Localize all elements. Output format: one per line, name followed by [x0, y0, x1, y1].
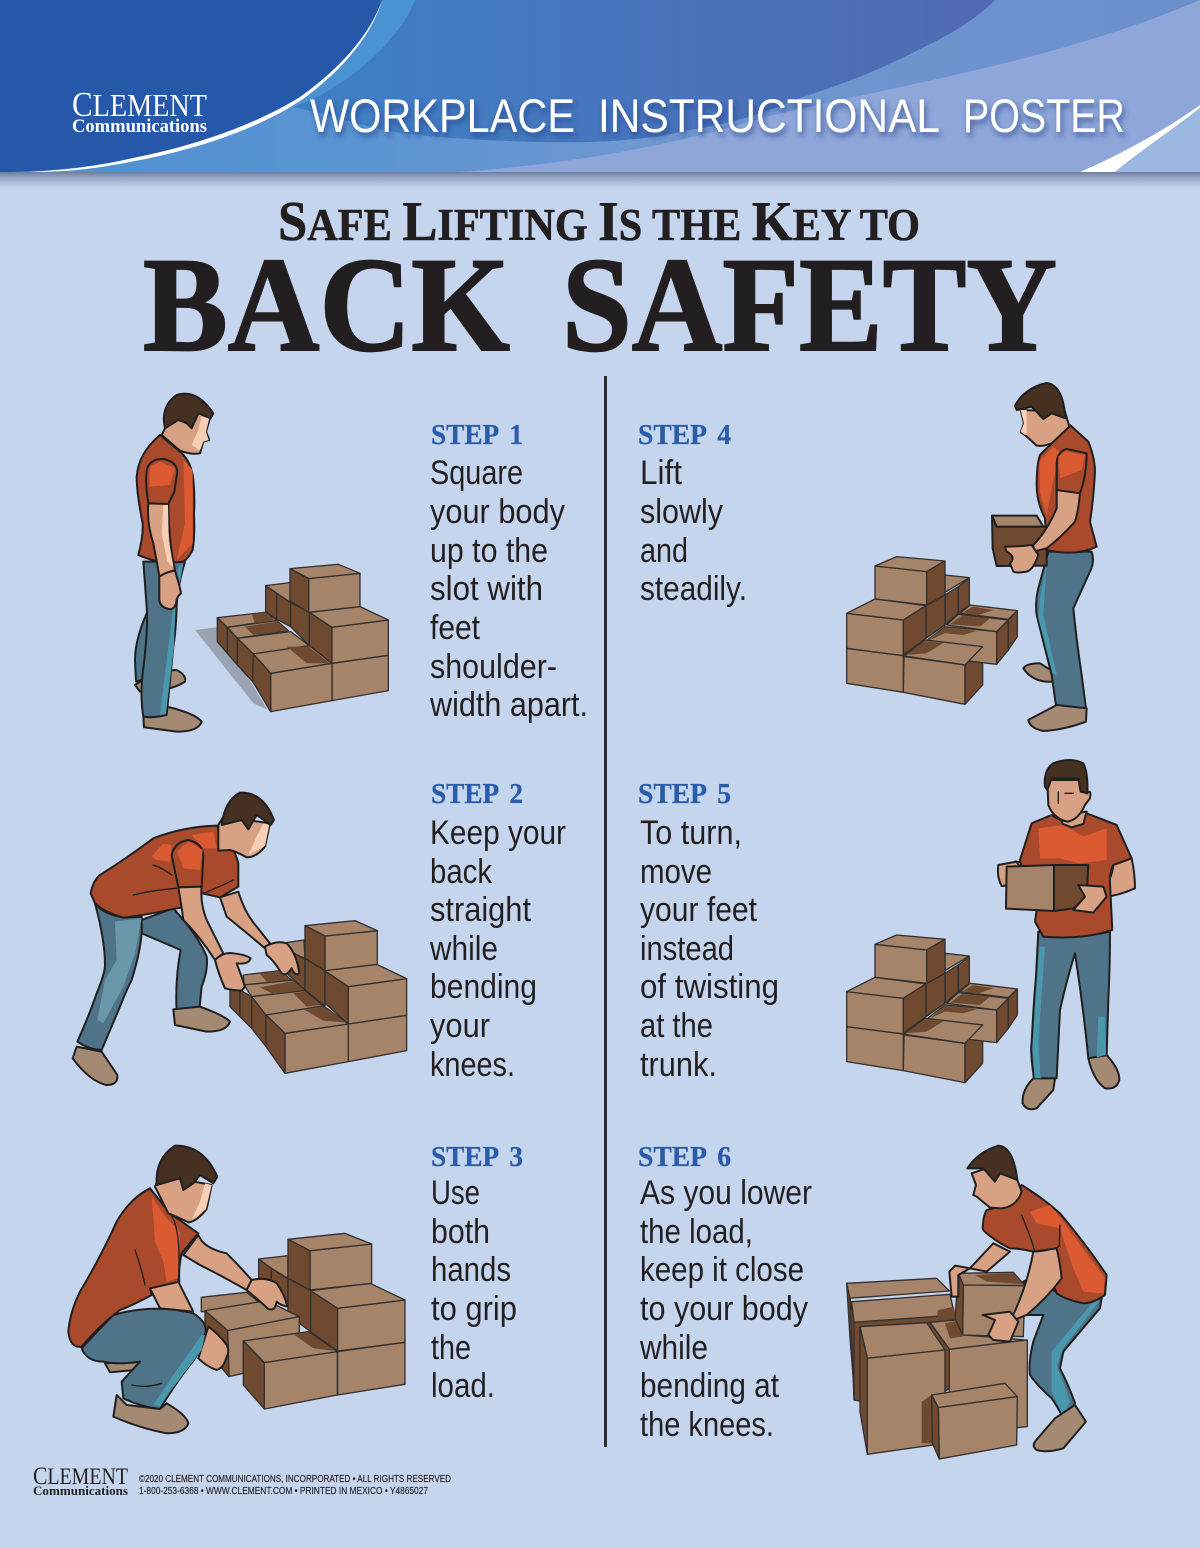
step 2 instructions: straight [430, 891, 531, 929]
step 2 instructions: bending [430, 968, 537, 1006]
step 1 illustration [135, 394, 388, 732]
step 3 instructions: to grip [431, 1290, 517, 1328]
step 1 instructions: your body [430, 493, 565, 531]
panel: step 5 [638, 760, 1135, 1109]
step 1 instructions: feet [430, 609, 480, 647]
step 4 instructions: Lift [640, 454, 683, 492]
step 5 instructions: your feet [640, 891, 757, 929]
step 3 instructions: load. [431, 1367, 495, 1405]
step 3 instructions: Use [431, 1174, 480, 1212]
panel: step 2 [73, 779, 566, 1085]
subtitle: SAFE LIFTING IS THE KEY TO [278, 191, 920, 253]
step 5 instructions: of twisting [640, 968, 779, 1006]
step 5 instructions: instead [640, 930, 734, 968]
step 6 instructions: keep it close [640, 1251, 804, 1289]
logo: Clement Communications: Communications [72, 116, 207, 137]
banner heading [310, 90, 1125, 143]
step 5 heading: STEP 5 [638, 779, 731, 810]
step 5 instructions: To turn, [640, 814, 742, 852]
footer legal text [139, 1474, 451, 1497]
step 6 heading: STEP 6 [638, 1142, 731, 1173]
footer legal text: ©2020 CLEMENT COMMUNICATIONS, INCORPORATED • ALL RIGHTS RESERVED [139, 1474, 451, 1485]
step 6 illustration [847, 1146, 1107, 1459]
header banner [0, 0, 1200, 188]
step 2 illustration [73, 793, 407, 1085]
main title: BACK [143, 231, 510, 380]
step 2 instructions: Keep your [430, 814, 566, 852]
step 3 heading: STEP 3 [431, 1142, 523, 1173]
banner heading: INSTRUCTIONAL [598, 90, 940, 143]
step 4 heading: STEP 4 [638, 420, 731, 451]
step 6 instructions: to your body [640, 1290, 808, 1328]
step 2 instructions: while [429, 930, 498, 968]
step 6 instructions [639, 1174, 812, 1444]
logo: Clement Communications [72, 85, 207, 137]
step 1 instructions: Square [430, 454, 523, 492]
step 4 instructions: steadily. [640, 570, 747, 608]
footer legal text: 1-800-253-6368 • WWW.CLEMENT.COM • PRINTED IN MEXICO • Y4865027 [139, 1486, 428, 1497]
step 4 illustration [847, 383, 1097, 731]
main title [143, 231, 1057, 380]
step 3 instructions [431, 1174, 517, 1405]
step 5 illustration [847, 760, 1135, 1109]
step 2 instructions: knees. [430, 1046, 515, 1084]
step 5 instructions [640, 814, 779, 1084]
step 2 instructions [429, 814, 566, 1084]
title block [143, 191, 1057, 380]
step 1 instructions: width apart. [429, 686, 588, 724]
step 3 illustration [68, 1146, 405, 1433]
footer logo: Communications [33, 1483, 128, 1498]
step 4 instructions: slowly [640, 493, 723, 531]
step 6 instructions: bending at [640, 1367, 779, 1405]
center divider [604, 376, 607, 1447]
step 5 instructions: move [640, 853, 712, 891]
step 1 instructions: up to the [430, 532, 548, 570]
panel: step 1 [135, 394, 588, 732]
step 3 instructions: hands [431, 1251, 511, 1289]
step 1 instructions: slot with [430, 570, 543, 608]
step 4 instructions [640, 454, 747, 608]
step 1 heading: STEP 1 [431, 420, 523, 451]
step 2 heading: STEP 2 [431, 779, 523, 810]
step 5 instructions: at the [640, 1007, 713, 1045]
panel: step 3 [68, 1142, 523, 1433]
banner heading: WORKPLACE [310, 90, 575, 143]
step 6 instructions: while [639, 1329, 708, 1367]
step 3 instructions: the [431, 1329, 471, 1367]
panel: step 4 [638, 383, 1097, 731]
logo: Clement Communications: CLEMENT [72, 85, 207, 124]
footer logo: CLEMENT [33, 1463, 128, 1490]
step 1 instructions [429, 454, 588, 724]
step 2 instructions: back [430, 853, 493, 891]
step 6 instructions: As you lower [640, 1174, 812, 1212]
step 1 instructions: shoulder- [430, 648, 557, 686]
panel: step 6 [638, 1142, 1107, 1459]
step 6 instructions: the knees. [640, 1406, 774, 1444]
step 3 instructions: both [431, 1213, 490, 1251]
footer logo [33, 1463, 128, 1498]
step 2 instructions: your [430, 1007, 490, 1045]
step 5 instructions: trunk. [640, 1046, 717, 1084]
banner heading: POSTER [963, 90, 1125, 143]
step 4 instructions: and [640, 532, 688, 570]
footer [33, 1463, 451, 1498]
main title: SAFETY [562, 231, 1057, 380]
step 6 instructions: the load, [640, 1213, 753, 1251]
